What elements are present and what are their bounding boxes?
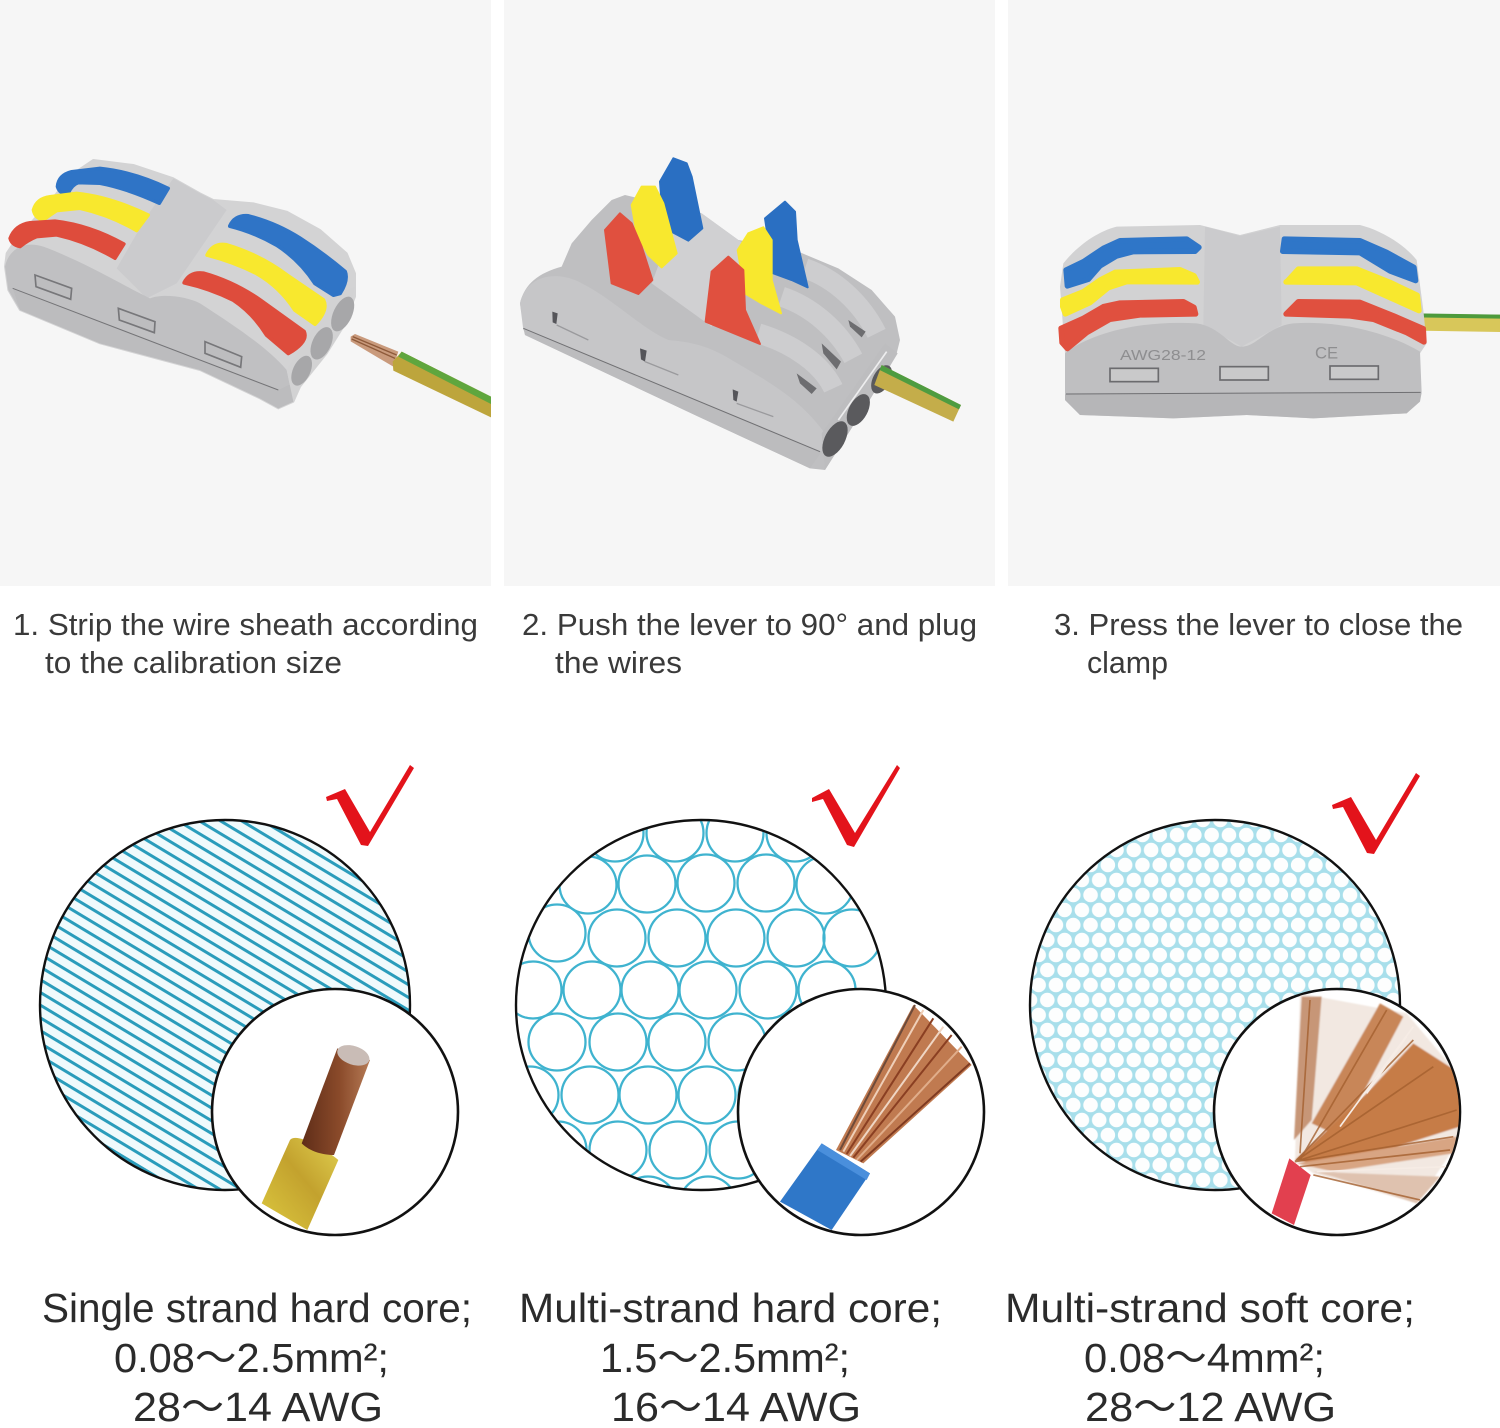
wire spec: multi-strand soft: 0.08～4mm²;: [1084, 1335, 1325, 1381]
panel: step 3: [1008, 0, 1500, 586]
wire inset: [212, 989, 458, 1235]
raised levers front row: [706, 202, 808, 344]
clamp windows: [35, 275, 242, 367]
panel: multi-strand soft core: [1030, 773, 1460, 1235]
magnified honeycomb circle: [1030, 820, 1400, 1190]
wire inset: [1214, 989, 1460, 1235]
magnified hatch circle: [40, 820, 410, 1190]
magnified ring circle: [514, 818, 887, 1192]
ribs: [758, 268, 877, 388]
inserted wire: [874, 365, 961, 422]
check mark: [1332, 773, 1420, 854]
inserted wire: [1417, 313, 1500, 332]
front face: [5, 245, 293, 408]
moulded marks: CE: [1315, 343, 1338, 362]
wire spec: single strand: Single strand hard core;: [42, 1285, 472, 1331]
wire spec: single strand: [42, 1285, 472, 1428]
step 3 caption: clamp: [1087, 645, 1168, 680]
step 3 caption: [1054, 607, 1463, 680]
stripped wire: [351, 334, 491, 417]
panel: step 2: [504, 0, 995, 586]
connector with closed levers front view: [1060, 225, 1500, 418]
panel: single strand hard core: [40, 765, 458, 1235]
step 2 caption: the wires: [555, 645, 682, 680]
front face: [520, 276, 825, 452]
wire end face: [822, 343, 898, 470]
wire spec: multi-strand hard: Multi-strand hard core;: [519, 1285, 942, 1331]
step 2 caption: 2. Push the lever to 90° and plug: [522, 607, 977, 642]
connector with closed levers and stripped wire: [5, 160, 491, 417]
step 1 caption: 1. Strip the wire sheath according: [13, 607, 478, 642]
step 1 caption: [13, 607, 478, 680]
wire spec: single strand: 0.08～2.5mm²;: [114, 1335, 389, 1381]
step 3 caption: 3. Press the lever to close the: [1054, 607, 1463, 642]
front face: [1065, 323, 1422, 394]
connector body: [1060, 225, 1427, 418]
check mark: [326, 765, 414, 846]
levers right: [184, 216, 346, 353]
levers left: [10, 168, 168, 258]
levers left: [1061, 239, 1199, 349]
wire spec: multi-strand soft: Multi-strand soft core;: [1005, 1285, 1415, 1331]
raised levers back row: [605, 158, 702, 294]
wire spec: multi-strand hard: 1.5～2.5mm²;: [600, 1335, 850, 1381]
step 2 caption: [522, 607, 977, 680]
clamp windows: [552, 312, 773, 417]
clamp windows: [1110, 366, 1378, 382]
check mark: [812, 765, 900, 847]
levers right: [1283, 239, 1424, 342]
end face with wire holes: [287, 287, 355, 402]
panel: multi-strand hard core: [502, 765, 984, 1235]
wire spec: multi-strand soft: [1005, 1285, 1415, 1428]
moulded marks: [1120, 343, 1338, 364]
panel: step 1: [0, 0, 491, 586]
step 1 caption: to the calibration size: [45, 645, 342, 680]
moulded marks: AWG28-12: [1120, 348, 1206, 364]
wire inset: [738, 989, 984, 1235]
slits: [797, 320, 866, 394]
wire spec: multi-strand hard: [519, 1285, 942, 1428]
connector with raised levers and inserted wire: [520, 158, 961, 470]
